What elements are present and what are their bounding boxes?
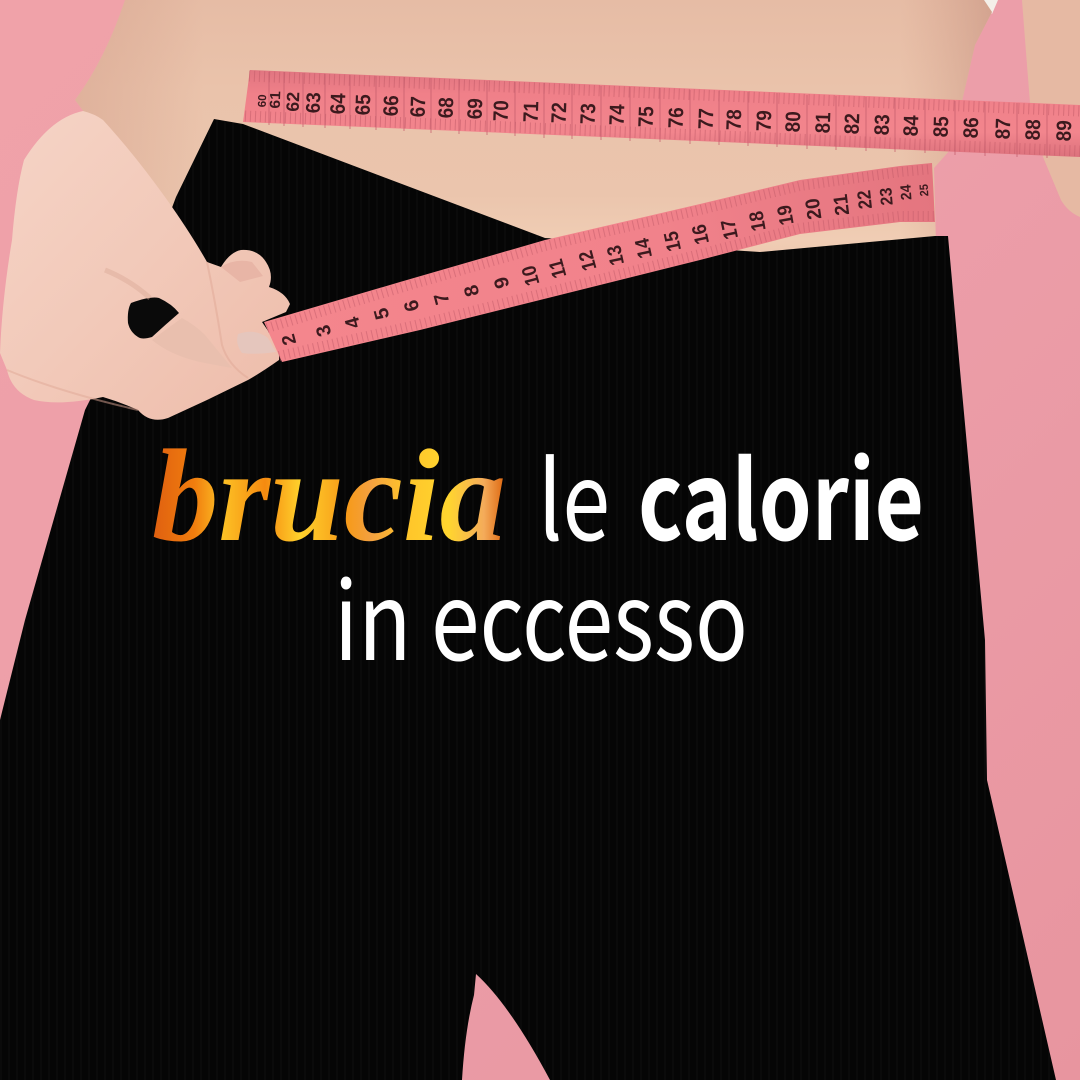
- lower measuring tape: 12: [575, 248, 602, 273]
- upper measuring tape: 88: [1022, 119, 1046, 141]
- inner fold of the palm: [152, 318, 232, 368]
- upper measuring tape: 64: [327, 93, 351, 115]
- gap between fingers: [128, 298, 179, 338]
- upper measuring tape: 85: [930, 116, 954, 138]
- upper measuring tape: 66: [380, 95, 404, 117]
- upper measuring tape: 72: [548, 102, 572, 124]
- upper measuring tape: 87: [992, 118, 1016, 140]
- thumb nail: [237, 332, 276, 354]
- upper measuring tape: 84: [900, 115, 924, 137]
- headline word: le: le: [538, 416, 610, 572]
- lower measuring tape: 2: [278, 332, 301, 347]
- lower measuring tape: 17: [717, 217, 743, 241]
- upper measuring tape: 61: [267, 90, 284, 109]
- upper measuring tape: 70: [490, 100, 514, 122]
- lower measuring tape: 3: [312, 322, 336, 339]
- upper measuring tape: 80: [782, 111, 806, 133]
- right arm: [1022, 0, 1080, 217]
- upper measuring tape: 74: [606, 104, 630, 126]
- lower measuring tape: 9: [490, 274, 514, 291]
- lower measuring tape: 15: [660, 229, 686, 253]
- headline word: calorie: calorie: [638, 416, 924, 572]
- lower measuring tape: 21: [829, 193, 854, 217]
- lower measuring tape: 5: [370, 305, 394, 322]
- upper measuring tape: 69: [464, 98, 488, 120]
- lower measuring tape: 4: [341, 313, 365, 331]
- lower measuring tape: 6: [400, 297, 424, 314]
- upper measuring tape: 65: [352, 94, 376, 116]
- lower measuring tape: 20: [801, 197, 827, 221]
- lower measuring tape: 16: [688, 222, 714, 246]
- upper measuring tape: 60: [257, 94, 269, 108]
- upper measuring tape: 89: [1053, 120, 1077, 142]
- hand holding the tape: [0, 111, 290, 420]
- upper measuring tape: 77: [695, 108, 719, 130]
- lower measuring tape: 10: [518, 263, 545, 288]
- torso: [75, 0, 992, 300]
- upper measuring tape: 73: [577, 103, 601, 125]
- upper measuring tape: 75: [635, 106, 659, 128]
- headline line two: in eccesso: in eccesso: [334, 536, 748, 692]
- lower measuring tape: 7: [430, 290, 454, 307]
- folded fingers: [221, 261, 263, 282]
- lower measuring tape: 13: [603, 243, 629, 267]
- upper measuring tape: 82: [841, 113, 865, 135]
- upper measuring tape: 86: [960, 117, 984, 139]
- lower measuring tape: [264, 163, 935, 362]
- upper measuring tape: [243, 70, 1080, 158]
- headline: [152, 416, 924, 692]
- upper measuring tape: 62: [283, 91, 303, 112]
- upper measuring tape: 81: [812, 112, 836, 134]
- lower measuring tape: 23: [877, 187, 897, 206]
- lower measuring tape: 14: [631, 236, 657, 260]
- lower measuring tape: 11: [545, 256, 572, 281]
- upper measuring tape: 63: [302, 92, 326, 114]
- upper measuring tape: 78: [723, 109, 747, 131]
- lower measuring tape: 19: [774, 203, 799, 227]
- headline word: brucia: brucia: [152, 422, 506, 569]
- upper measuring tape: 68: [435, 97, 459, 119]
- lower measuring tape: 8: [460, 282, 484, 299]
- upper measuring tape: 83: [871, 114, 895, 136]
- upper measuring tape: 71: [520, 101, 544, 123]
- lower measuring tape: 25: [918, 183, 931, 197]
- lower measuring tape: 18: [746, 209, 771, 233]
- lower measuring tape: 22: [853, 189, 876, 210]
- lower measuring tape: 24: [898, 184, 916, 201]
- bra strap: [982, 0, 998, 14]
- upper measuring tape: 76: [665, 107, 689, 129]
- upper measuring tape: 67: [407, 96, 431, 118]
- upper measuring tape: 79: [753, 110, 777, 132]
